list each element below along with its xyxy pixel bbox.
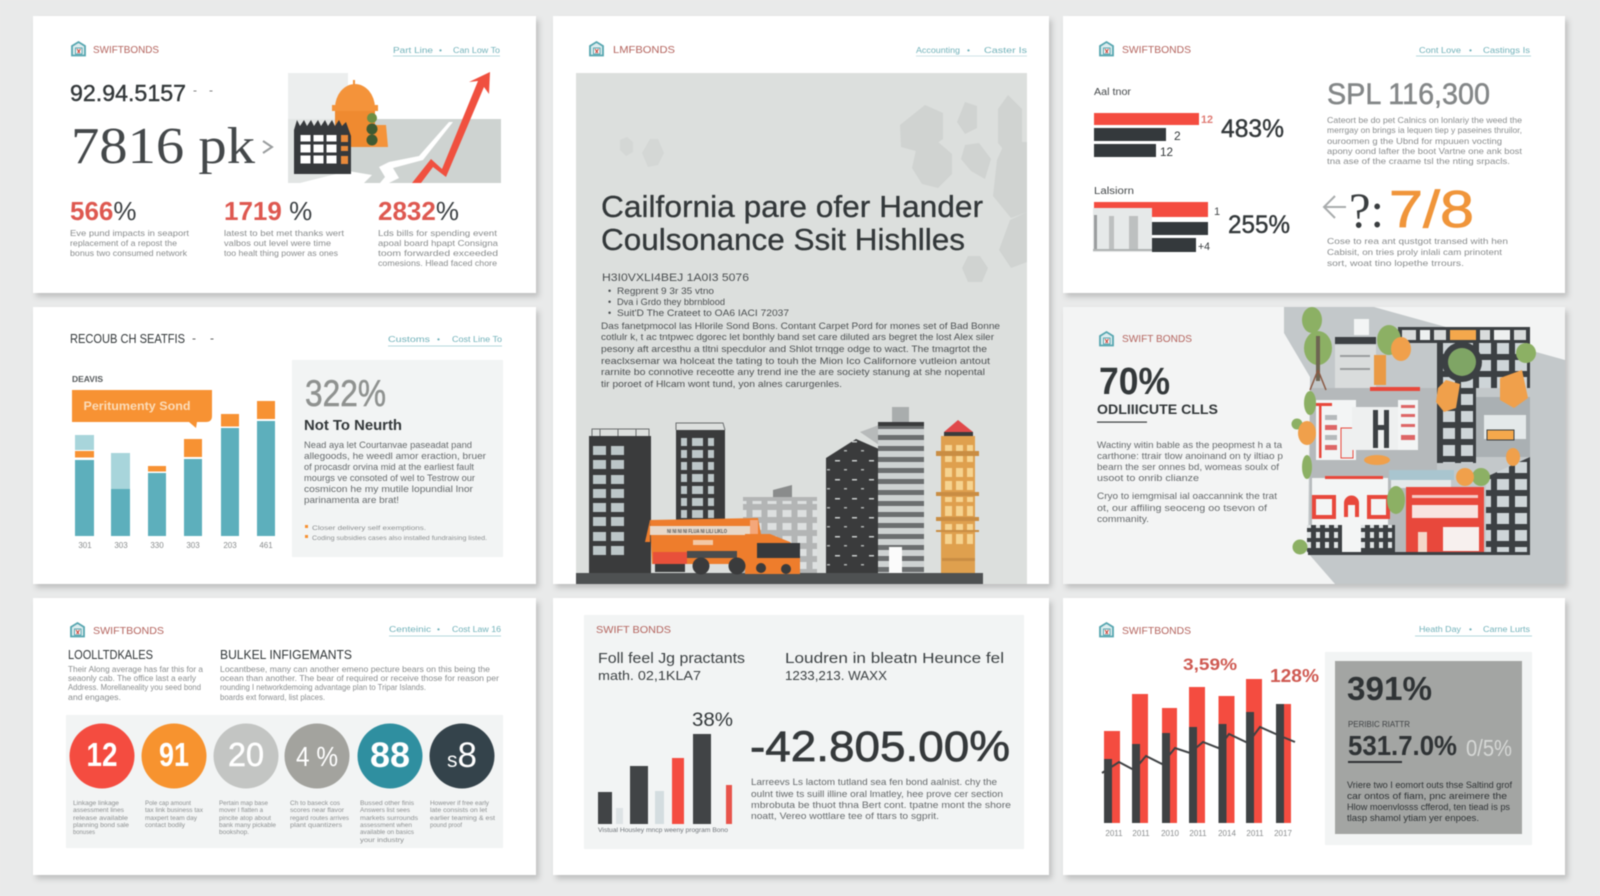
body paragraph: oulnt tiwe ts suill illine oral lmatley, hee prove cer section xyxy=(751,789,1003,800)
stat: 566%: Eve pund impacts in seaport xyxy=(70,228,190,238)
brand header xyxy=(71,623,164,637)
text block: right column: BULKEL INFIGEMANTS xyxy=(220,648,352,662)
underline xyxy=(1097,422,1147,423)
big figure and text: Cateort be do pet Calnics on lonlariy the weed the xyxy=(1327,115,1522,125)
side panel: key figure: parinamenta are brat! xyxy=(304,495,399,506)
stat circle: 12: release available xyxy=(73,815,128,822)
navigation links: Part Line xyxy=(393,45,433,55)
stat circle: 20: Pertain map base xyxy=(219,800,268,807)
stat circle: s8: pound proof xyxy=(430,822,462,829)
arrow and fraction: 7/8 xyxy=(1389,181,1474,239)
horizontal bar group 1: 12 xyxy=(1160,145,1173,159)
stat circle: 20: 20 xyxy=(228,736,264,773)
text block: right column: boards ext forward, list places. xyxy=(220,692,325,702)
body paragraph: reaclxsemar wa holceat the tating to touh the Mion Ico Californore vutleion antout xyxy=(601,356,990,367)
stat circle: 20: mover I flatten a xyxy=(219,807,263,814)
body paragraph xyxy=(601,321,1000,390)
stat: 566%: 566% xyxy=(70,196,137,226)
navigation links: Cost Law 16 xyxy=(452,624,501,634)
side panel: grey stats: Hlow moenvlosss cfferod, ten tiead is ps xyxy=(1347,802,1510,812)
stat circle: s8: However if free early xyxy=(430,800,490,807)
body paragraph: noatt, Vereo wottlare tee of ttars to sgprit. xyxy=(751,811,939,822)
dark tower right xyxy=(1437,388,1476,463)
illustration: cityscape xyxy=(576,407,983,584)
key figure: 70% xyxy=(1099,361,1170,403)
big figure and text: merrgay on brings ia lequen tiep y paseines thruilor, xyxy=(1327,125,1522,135)
stat: 2832%: Lds bills for spending event xyxy=(378,228,498,238)
horizontal bar group 2: +4 xyxy=(1198,241,1210,253)
combo chart: 3,59% xyxy=(1183,655,1237,674)
big figure and text: apony oond lafter the boot Vartne one ank bost xyxy=(1327,146,1523,156)
brand header xyxy=(590,42,675,56)
combo chart: 2014 xyxy=(1218,829,1236,838)
caption text: Cose to rea ant qustgot transed with hen xyxy=(1327,236,1508,246)
panel: bottom-centre big figure slide xyxy=(553,598,1049,875)
stat circle: 12 xyxy=(70,724,134,836)
text block: left column xyxy=(68,648,203,702)
combo chart: 2017 xyxy=(1274,829,1292,838)
heading figure: 92.94.5157 xyxy=(70,80,186,106)
stat circle: 91 xyxy=(142,724,206,829)
building 2 xyxy=(676,423,725,530)
horizontal bar group 1: 483% xyxy=(1221,115,1284,143)
bar chart: 461 xyxy=(259,541,273,550)
stat circle: 91: maxpert team day xyxy=(145,815,198,822)
stat circle: s8: late consists on let xyxy=(430,807,487,814)
side panel: grey stats xyxy=(1325,652,1532,845)
navigation links: Accounting xyxy=(916,45,960,55)
bottom-left white civic building xyxy=(1307,476,1395,553)
side panel: grey stats: 531.7.0% xyxy=(1348,730,1457,761)
big figure and text: tna ase of the craame tsl the nting srpacls. xyxy=(1327,156,1510,166)
horizontal bar group 1 xyxy=(1094,87,1284,159)
bar chart: 330 xyxy=(150,541,164,550)
building 1 xyxy=(589,429,651,573)
caption text: Cabisit, on tries proly inlali cam prinotent xyxy=(1327,247,1503,257)
side panel: key figure: 322% xyxy=(305,373,386,414)
combo chart: 2011 xyxy=(1132,829,1150,838)
stat circle: 4%: Ch to baseck cos xyxy=(290,800,341,807)
stat: 1719% xyxy=(224,196,345,258)
arrow and fraction: ?: xyxy=(1349,182,1384,238)
body text xyxy=(1097,440,1283,525)
stat circle: 88: markets surrounds xyxy=(360,815,419,822)
navigation links: • xyxy=(967,45,970,55)
side panel: grey stats: 391% xyxy=(1347,670,1432,707)
text block: right column: rounding I networkdemoing advantage plan to Tripar Islands. xyxy=(220,682,426,692)
arrow and fraction xyxy=(1324,181,1474,239)
fire engine: NI NI NI NI FLUA NI LILI LIKLO xyxy=(667,529,727,535)
text block: left column: LOOLLTDKALES xyxy=(68,648,153,662)
bar chart: 301 xyxy=(78,541,92,550)
side panel: key figure: cosmicon he my mutile lopundial lnor xyxy=(304,484,473,495)
caption text: sort, woat tino lopethe trrours. xyxy=(1327,258,1464,268)
stat: 2832%: apoal board hpapt Consigna xyxy=(378,238,498,248)
stat circle: 88: your industry xyxy=(360,837,405,844)
subheading and bullets: Regprent 9 3r 35 vtno xyxy=(617,286,714,296)
stat circle: 20 xyxy=(214,724,278,836)
stat: 1719%: latest to bet met thanks wert xyxy=(224,228,345,238)
subheading and bullets: H3I0VXLI4BEJ 1A0I3 5076 xyxy=(602,272,749,284)
stat circle: 91: Pole cap amount xyxy=(145,800,191,807)
dark tower xyxy=(826,425,879,573)
heading: RECOUB CH SEATFIS xyxy=(70,331,185,346)
header dashes: - - xyxy=(192,331,214,345)
subheading and bullets xyxy=(602,272,789,318)
stat circle: 4%: regard routes arrives xyxy=(290,815,350,822)
brand header xyxy=(1100,623,1191,637)
side panel: key figure xyxy=(292,360,503,557)
bar chart: 203 xyxy=(223,541,237,550)
horizontal bar group 2: 1 xyxy=(1214,206,1220,218)
brand header xyxy=(72,42,159,56)
headline: Cailfornia pare ofer Hander xyxy=(601,189,983,224)
bar chart: Vistual Housley mncp weeny program Bono xyxy=(598,827,728,834)
text block: right column: ocean than another. The bear of required or receive those for reason per xyxy=(220,673,499,683)
navigation links xyxy=(389,624,501,636)
big figure and text: SPL 116,300 xyxy=(1327,78,1490,111)
body paragraph: mbrobuta be thuot thna Bert cont. tpatne mont the shore xyxy=(751,800,1011,811)
caption text xyxy=(1327,236,1508,268)
stat circle: 4%: plant quantizers xyxy=(290,822,343,829)
bar chart xyxy=(72,375,275,550)
navigation links: • xyxy=(437,624,440,634)
body text: carthone: ttrair tlow anoinand on ty iltiao p xyxy=(1097,451,1283,462)
big figure and text xyxy=(1327,78,1523,166)
stat circle: 20: bank many pickable xyxy=(219,822,276,829)
stat circle: 4% xyxy=(284,724,350,829)
navigation links: Castings Is xyxy=(1483,45,1530,55)
combo chart: 2011 xyxy=(1105,829,1123,838)
side panel: grey stats: 0/5% xyxy=(1466,735,1512,761)
navigation links: Centeinic xyxy=(389,624,432,634)
navigation links xyxy=(1415,624,1532,636)
brand: SWIFT BONDS xyxy=(596,624,671,636)
panel: bottom-left circles slide xyxy=(33,598,536,875)
subheading and bullets: • xyxy=(608,308,611,318)
stat: 1719%: 1719 % xyxy=(224,196,312,226)
central grey ground xyxy=(1310,388,1437,553)
stat circle: 12: 12 xyxy=(86,736,118,773)
brand header: SWIFT BONDS xyxy=(1122,333,1192,345)
combo chart: 128% xyxy=(1270,666,1319,686)
grey backdrop xyxy=(576,73,1027,584)
combo chart xyxy=(1102,655,1319,838)
stat: 566% xyxy=(70,196,190,258)
bar chart xyxy=(598,710,733,834)
stat circle: s8: s8 xyxy=(447,736,477,775)
header dashes: - - xyxy=(193,83,213,97)
stat circle: 88 xyxy=(358,724,422,844)
navigation links: • xyxy=(437,334,440,344)
navigation links: Customs xyxy=(388,334,430,344)
stat circle: s8: earlier teaming & est xyxy=(430,815,495,822)
combo chart: 2011 xyxy=(1246,829,1264,838)
body paragraph: pesony aft arcesthu a tltni specdulor and Shlot trnqge odge to wact. The tmagrtot the xyxy=(601,344,987,355)
navigation links xyxy=(916,45,1027,56)
red building xyxy=(1406,487,1484,553)
text block: left column: seaonly cab. The office last a early xyxy=(68,673,197,683)
base line xyxy=(1308,552,1530,555)
stat circle: 4%: 4 % xyxy=(296,741,338,772)
stat: 2832% xyxy=(378,196,498,268)
side panel: grey stats: car ontos of fiam, pnc areimere the xyxy=(1347,791,1507,801)
body paragraph: rarnite bo connotive receotte any trend ine the are society stanung at she nopental xyxy=(601,367,985,378)
large serif figure: 7816 pk xyxy=(71,118,255,175)
subheading and bullets: Dva i Grdo they bbrnblood xyxy=(617,297,725,307)
body text: bearn the ser onnes bd, womeas soulx of xyxy=(1097,462,1279,473)
top white building xyxy=(1335,319,1386,388)
text block: left column: Their Along average has far this for a xyxy=(68,664,203,674)
stat: 2832%: toom forwarded exceeded xyxy=(378,248,498,258)
side panel: key figure: allegoods, he weedl amor eraction, bruer xyxy=(304,451,486,462)
dark frame top right xyxy=(1398,327,1530,388)
horizontal bar group 1: Aal tnor xyxy=(1094,87,1132,98)
brand header: SWIFTBONDS xyxy=(1122,44,1191,56)
brand header: SWIFTBONDS xyxy=(93,625,164,637)
stat: 1719%: valbos out level were time xyxy=(224,238,331,248)
striped tower xyxy=(878,407,924,573)
combo chart: 2011 xyxy=(1189,829,1207,838)
stat circle: 88: 88 xyxy=(370,736,410,775)
bar chart: 303 xyxy=(186,541,200,550)
stat circle: 88: available on basics xyxy=(360,829,415,836)
stat circle: 12: Linkage linkage xyxy=(73,800,119,807)
right heading xyxy=(785,650,1004,683)
panel: top-right horizontal bars slide xyxy=(1063,16,1565,293)
orange tower xyxy=(936,420,979,573)
body paragraph: cotlulr k, t ac tntpwec dgorec let bonthly band set care diluted ars begret the lost Alex siler xyxy=(601,332,994,343)
right heading: Loudren in bleatn Heunce fel xyxy=(785,650,1004,667)
stat circle: 91: 91 xyxy=(159,736,189,773)
left heading: math. 02,1KLA7 xyxy=(598,668,701,683)
body paragraph: Larreevs Ls lactom tutland sea fen bond aalnist. chy the xyxy=(751,777,997,788)
navigation links: Cont Love xyxy=(1419,45,1461,55)
brand header: SWIFTBONDS xyxy=(1122,625,1191,637)
grey low-rise xyxy=(743,485,817,573)
brand header: LMFBONDS xyxy=(613,44,675,56)
stat circle: s8 xyxy=(430,724,495,829)
subheading and bullets: • xyxy=(608,297,611,307)
side panel: key figure: mourgs ve consoted of wel to Testrow our xyxy=(304,473,475,484)
left heading xyxy=(598,650,745,683)
bar chart: DEAVIS xyxy=(72,375,104,384)
left white and red building xyxy=(1316,400,1356,460)
stat: 2832%: 2832% xyxy=(378,196,459,226)
navigation links: Caster Is xyxy=(984,45,1027,55)
panel: middle-left bar chart slide xyxy=(33,307,536,584)
big figure and text: ouroomen g the Ubnd for mpuuen vocting xyxy=(1327,136,1502,146)
side panel: key figure: Nead aya let Courtanvae paseadat pand xyxy=(304,440,472,451)
background hexagon texture xyxy=(620,95,1027,282)
navigation links: • xyxy=(1469,45,1472,55)
stat circle: 20: pincite atop about xyxy=(219,815,271,822)
stat circle: 20: bookshop. xyxy=(219,829,249,836)
brand header: SWIFTBONDS xyxy=(93,44,159,56)
subheading and bullets: • xyxy=(608,286,611,296)
headline: Coulsonance Ssit Hishlles xyxy=(601,222,965,257)
bar chart: 303 xyxy=(114,541,128,550)
body text: commanity. xyxy=(1097,514,1149,525)
body text: ot, our affiling seoceng oo tsevon of xyxy=(1097,503,1267,514)
body text: Cryo to iemgmisal ial oaccannink the trat xyxy=(1097,491,1277,502)
side panel: key figure: Closer delivery self exemptions. xyxy=(312,525,426,532)
stat circle: 4%: scores near flavor xyxy=(290,807,345,814)
subheading: ODLIIICUTE CLLS xyxy=(1097,401,1218,417)
panel: bottom-right combo chart slide xyxy=(1063,598,1565,875)
side panel: key figure: Coding subsidies cases also installed fundraising listed. xyxy=(312,535,487,542)
stat circle: 91: tax link business tax xyxy=(145,807,204,814)
side panel: grey stats: Vriere two I eomort outs thse Saltind grof xyxy=(1347,780,1512,790)
navigation links xyxy=(1416,45,1531,56)
callout xyxy=(72,390,212,428)
horizontal bar group 2: 255% xyxy=(1228,211,1290,239)
stat: 2832%: comesions. Hlead faced chore xyxy=(378,258,497,268)
navigation links xyxy=(388,334,502,346)
big figure: -42.805.00% xyxy=(750,723,1010,771)
stat: 1719%: too healt thing power as ones xyxy=(224,248,338,258)
blue roof xyxy=(1389,470,1454,488)
ring tree xyxy=(1442,342,1482,382)
headline xyxy=(601,189,983,257)
side panel: key figure: of procasdr orvina mid at the earliest fault xyxy=(304,462,474,473)
foliage xyxy=(1292,307,1536,554)
horizontal bar group 1: 12 xyxy=(1201,114,1213,126)
text block: right column: Locantbese, many can another emeno pecture bears on this being the xyxy=(220,664,490,674)
stat circle: 88: Answers list sees xyxy=(360,807,411,814)
combo chart: 2010 xyxy=(1161,829,1179,838)
navigation links: • xyxy=(439,45,442,55)
text block: left column: Address. Morellaneality you seed bond xyxy=(68,682,201,692)
stat circle: 12: bonuses xyxy=(73,829,96,836)
bar chart: 38% xyxy=(692,710,733,731)
side panel: grey stats: tlasp shamol ytiam yer enpoes. xyxy=(1347,813,1479,823)
horizontal bar group 1: 2 xyxy=(1174,129,1181,143)
right heading: 1233,213. WAXX xyxy=(785,668,887,683)
callout: Peritumenty Sond xyxy=(84,399,190,413)
panel: middle-right city illustration slide xyxy=(1063,307,1565,584)
text block: left column: and engages. xyxy=(68,692,121,702)
dark building lower right xyxy=(1486,457,1530,553)
brand header xyxy=(1100,42,1191,56)
body paragraph: tir poroet of Hlcam wont tund, yon alnes carurgenles. xyxy=(601,379,842,390)
stat circle: 12: assessment lines xyxy=(73,807,125,814)
navigation links: Heath Day xyxy=(1419,624,1462,634)
stat circle: 88: Bussed other finis xyxy=(360,800,415,807)
grey block right xyxy=(1476,397,1530,457)
stat circle: 88: assessment when xyxy=(360,822,412,829)
body paragraph xyxy=(751,777,1011,822)
chevron xyxy=(263,141,272,153)
navigation links: Can Low To xyxy=(453,45,500,55)
text block: right column xyxy=(220,648,499,702)
side panel: grey stats: PERIBIC RIATTR xyxy=(1348,720,1410,729)
circle stats panel xyxy=(66,715,503,848)
body paragraph: Das fanetpmocol las Hlorile Sond Bons. Contant Carpet Pord for mones set of Bad Bonne xyxy=(601,321,1000,332)
stat circle: 12: planning bond sale xyxy=(73,822,129,829)
stat: 566%: replacement of a repost the xyxy=(70,238,177,248)
stat circle: 91: contact bodily xyxy=(145,822,186,829)
horizontal bar group 2 xyxy=(1093,186,1290,253)
body text: Wactiny witin bable as the peopmest h a ta xyxy=(1097,440,1283,451)
panel: centre headline slide xyxy=(553,16,1049,584)
fire engine xyxy=(645,518,800,574)
illustration: isometric city block xyxy=(1284,307,1565,584)
navigation links xyxy=(393,45,500,56)
body text: usoot to onrib clianze xyxy=(1097,473,1199,484)
brand header xyxy=(1100,332,1192,346)
left heading: Foll feel Jg practants xyxy=(598,650,745,667)
central H building xyxy=(1352,387,1420,450)
horizontal bar group 2: Lalsiorn xyxy=(1094,186,1134,197)
subheading and bullets: Suit'D The Crateet to OA6 IACI 72037 xyxy=(617,308,789,318)
navigation links: Carne Lurts xyxy=(1483,624,1530,634)
panel: top-left stats slide xyxy=(33,16,536,293)
navigation links: • xyxy=(1469,624,1472,634)
side panel: key figure: Not To Neurth xyxy=(304,417,402,434)
illustration: city with rising arrow xyxy=(288,72,501,183)
navigation links: Cost Line To xyxy=(452,334,502,344)
stat: 566%: bonus two consumed network xyxy=(70,248,188,258)
